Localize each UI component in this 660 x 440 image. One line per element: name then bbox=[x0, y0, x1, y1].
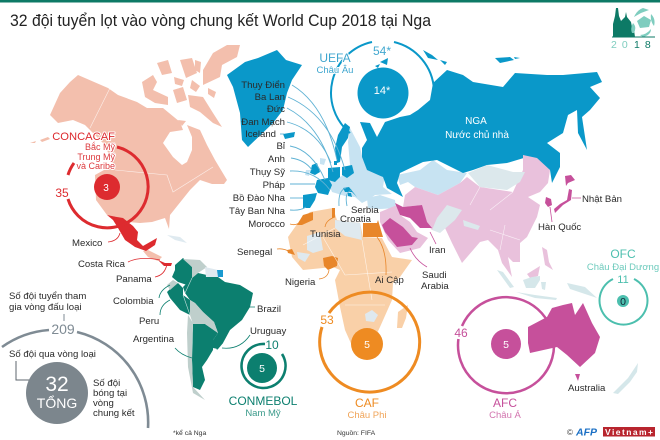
labels: other countries: Costa Rica bbox=[78, 259, 126, 270]
total panel: qualifying summary: 209 bbox=[51, 321, 75, 337]
credits: AFP and Vietnam+: Vietnam+ bbox=[605, 427, 653, 437]
labels: other countries: Argentina bbox=[133, 334, 175, 345]
source: Nguồn: FIFA bbox=[337, 428, 376, 437]
map: Iran and Saudi Arabia bbox=[382, 203, 432, 247]
circle: CONCACAF: CONCACAF bbox=[52, 131, 115, 143]
labels: UEFA countries: Bồ Đào Nha bbox=[233, 193, 286, 204]
circle: CAF: 53 bbox=[320, 313, 334, 327]
labels: UEFA countries: Bỉ bbox=[276, 141, 286, 152]
total panel: qualifying summary: Số đội bbox=[93, 378, 120, 389]
circle: UEFA: 54* bbox=[373, 44, 391, 58]
map: Russia bbox=[360, 70, 602, 197]
labels: UEFA countries: Pháp bbox=[263, 180, 285, 191]
labels: other countries: Nigeria bbox=[285, 277, 316, 288]
map: Mongolia and Afghanistan bbox=[432, 165, 525, 233]
label: Russia host: Nước chủ nhà bbox=[445, 129, 509, 141]
map: African teams bbox=[287, 208, 383, 270]
labels: other countries: Morocco bbox=[248, 219, 285, 230]
circle: OFC: Châu Đại Dương bbox=[587, 262, 659, 273]
circle: AFC bbox=[454, 297, 554, 421]
labels: UEFA countries bbox=[229, 80, 286, 217]
circle: AFC: 5 bbox=[503, 339, 509, 351]
labels: UEFA countries: Đan Mạch bbox=[241, 117, 285, 128]
total panel: qualifying summary: bóng tại bbox=[93, 388, 127, 399]
map: Russian Arctic islands bbox=[375, 50, 520, 68]
map: Africa bbox=[288, 208, 412, 348]
labels: other countries: Australia bbox=[568, 383, 606, 394]
circle: AFC: Châu Á bbox=[489, 410, 522, 421]
circle: CONCACAF: Bắc Mỹ bbox=[85, 142, 115, 152]
labels: other countries: Panama bbox=[116, 274, 152, 285]
labels: other countries: Uruguay bbox=[250, 326, 286, 337]
map: pale South American countries bbox=[167, 259, 218, 400]
map: Serbia and Croatia bbox=[343, 187, 357, 197]
circle: CONCACAF bbox=[52, 131, 148, 228]
map: Australia bbox=[528, 303, 600, 381]
labels: other countries: Iran bbox=[429, 245, 446, 256]
circle: CAF: 5 bbox=[364, 339, 370, 351]
total panel: qualifying summary: Số đội tuyển tham bbox=[9, 291, 86, 302]
footnote: *kể cả Nga bbox=[173, 429, 206, 437]
labels: other countries: Mexico bbox=[72, 238, 102, 249]
map: Indonesia and Oceania islands bbox=[497, 270, 638, 394]
credits: AFP and Vietnam+: AFP bbox=[575, 426, 598, 438]
leader lines: other confederations bbox=[108, 198, 581, 358]
map: Greenland and Iceland bbox=[227, 50, 302, 147]
circle: CONCACAF: 35 bbox=[55, 186, 69, 200]
credits: AFP and Vietnam+ bbox=[567, 426, 655, 438]
top bar bbox=[0, 0, 660, 2]
labels: other countries: Ai Cập bbox=[375, 275, 404, 286]
circle: OFC: OFC bbox=[610, 247, 636, 261]
labels: UEFA countries: Thụy Sỹ bbox=[250, 167, 285, 178]
total panel: qualifying summary: TỔNG bbox=[37, 394, 77, 411]
map: Mexico and Costa Rica, Panama bbox=[107, 215, 172, 266]
map: eastern Europe and Kazakhstan bbox=[305, 128, 467, 209]
total panel: qualifying summary: 32 bbox=[45, 373, 69, 396]
credits: AFP and Vietnam+: © bbox=[567, 428, 573, 437]
map: French Guiana bbox=[217, 270, 223, 277]
labels: UEFA countries: Tây Ban Nha bbox=[229, 206, 286, 217]
map: pale African countries bbox=[297, 220, 378, 322]
labels: other countries: Senegal bbox=[237, 247, 272, 258]
labels: UEFA countries: Iceland bbox=[245, 129, 276, 140]
map: Guyana and Suriname bbox=[205, 267, 218, 277]
circle: UEFA bbox=[317, 42, 434, 133]
map: Europe teams bbox=[303, 123, 354, 208]
labels: other countries: Arabia bbox=[421, 281, 449, 292]
total panel: qualifying summary bbox=[2, 291, 148, 428]
total panel: qualifying summary: gia vòng đấu loại bbox=[9, 302, 82, 313]
labels: UEFA countries: Thụy Điển bbox=[241, 80, 285, 91]
circle: UEFA: 14* bbox=[374, 85, 391, 97]
circle: UEFA: Châu Âu bbox=[317, 65, 353, 76]
labels: other countries: Hàn Quốc bbox=[538, 222, 581, 233]
labels: UEFA countries: Anh bbox=[268, 154, 285, 165]
total panel: qualifying summary: chung kết bbox=[93, 408, 135, 419]
circle: CAF: Châu Phi bbox=[347, 410, 387, 421]
circle: OFC: 0 bbox=[620, 296, 626, 308]
circle: OFC bbox=[587, 247, 659, 325]
circle: CONMEBOL: 10 bbox=[265, 338, 279, 352]
labels: other countries: Saudi bbox=[422, 270, 447, 281]
labels: UEFA countries: Ba Lan bbox=[255, 92, 285, 103]
circle: CONCACAF: và Caribe bbox=[76, 161, 115, 171]
labels: other countries: Croatia bbox=[340, 214, 372, 225]
map: Caribbean bbox=[167, 235, 187, 243]
circle: CONCACAF: Trung Mỹ bbox=[77, 152, 115, 162]
map: Madagascar bbox=[397, 305, 408, 328]
labels: other countries: Peru bbox=[139, 316, 159, 327]
map: Japan and Korea bbox=[545, 175, 575, 213]
labels: other countries bbox=[72, 194, 622, 394]
logo: World Cup 2018: 20 bbox=[611, 39, 633, 51]
circle: CONMEBOL bbox=[229, 338, 298, 419]
circle: CONMEBOL: CONMEBOL bbox=[229, 394, 298, 408]
circle: UEFA: UEFA bbox=[319, 51, 351, 65]
title: 32 đội tuyển lọt vào vòng chung kết World Cup 2018 tại Nga bbox=[10, 11, 431, 30]
circle: OFC: 11 bbox=[617, 274, 629, 286]
logo: World Cup 2018: 18 bbox=[634, 39, 656, 51]
labels: other countries: Brazil bbox=[257, 304, 281, 315]
circle: CONMEBOL: Nam Mỹ bbox=[245, 408, 281, 419]
circle: CONCACAF: 3 bbox=[103, 183, 109, 194]
label: Russia host bbox=[445, 116, 509, 141]
labels: other countries: Nhật Bản bbox=[582, 194, 622, 205]
total panel: qualifying summary: Số đội qua vòng loại bbox=[9, 349, 96, 360]
labels: other countries: Serbia bbox=[351, 205, 379, 216]
circle: CONMEBOL: 5 bbox=[259, 363, 265, 375]
circle: CAF bbox=[320, 292, 420, 421]
total panel: qualifying summary: vòng bbox=[93, 398, 114, 409]
UEFA leader lines bbox=[280, 85, 352, 210]
map: South America bbox=[167, 258, 253, 390]
logo: World Cup 2018 bbox=[611, 8, 656, 51]
label: Russia host: NGA bbox=[465, 116, 487, 127]
labels: other countries: Colombia bbox=[113, 296, 154, 307]
circle: AFC: 46 bbox=[454, 326, 468, 340]
labels: other countries: Tunisia bbox=[310, 229, 341, 240]
circle: AFC: AFC bbox=[493, 396, 517, 410]
map: Asia bbox=[380, 155, 553, 278]
circle: CAF: CAF bbox=[355, 396, 379, 410]
map: North America bbox=[30, 45, 240, 261]
labels: UEFA countries: Đức bbox=[267, 104, 285, 115]
